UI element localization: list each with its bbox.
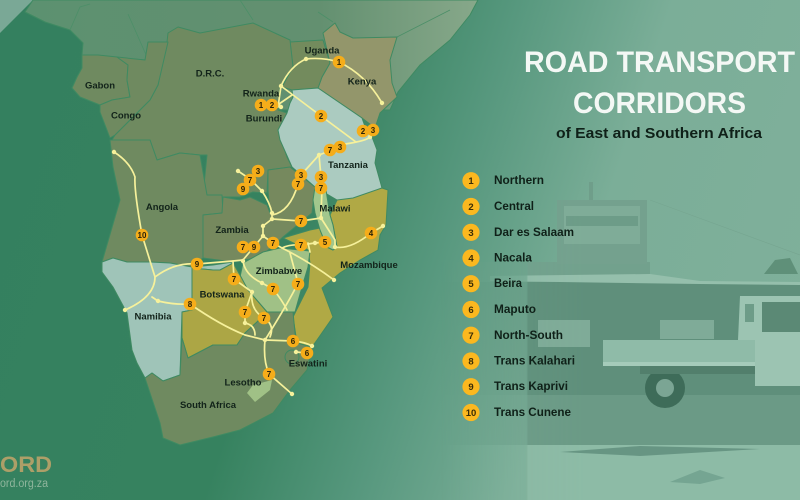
- corridor number badges: 7: [296, 280, 301, 289]
- country: South Africa: [145, 312, 312, 445]
- country: Tanzania: [278, 88, 382, 200]
- country labels: South Africa: [180, 400, 237, 411]
- country: Uganda: [282, 40, 330, 90]
- country labels: Angola: [146, 202, 179, 213]
- corridor number badges: 7: [241, 243, 246, 252]
- country: Zimbabwe: [240, 248, 310, 312]
- country labels: Uganda: [305, 46, 340, 56]
- corridor number badges: 5: [323, 238, 328, 247]
- corridor number badges: 2: [319, 112, 324, 121]
- country labels: Mozambique: [340, 260, 398, 271]
- country labels: Congo: [111, 110, 141, 122]
- corridor number badges: [136, 56, 379, 380]
- country: Zambia: [203, 167, 315, 262]
- country labels: Lesotho: [225, 378, 262, 388]
- country: Mozambique: [283, 188, 388, 347]
- corridor number badges: 2: [361, 127, 366, 136]
- country: Gabon: [72, 55, 130, 105]
- legend: corridors: 4: [468, 254, 474, 264]
- corridor number badges: 6: [291, 337, 296, 346]
- country labels: Zambia: [215, 225, 249, 236]
- northern land mass: [25, 0, 478, 110]
- country labels: Kenya: [348, 76, 377, 88]
- corridor number badges: 7: [262, 314, 267, 323]
- country labels: Eswatini: [289, 358, 327, 370]
- corridor number badges: 3: [338, 143, 343, 152]
- corridor number badges: 7: [328, 146, 333, 155]
- country: Congo: [100, 42, 168, 138]
- country: Eswatini: [285, 350, 299, 364]
- legend: corridors: 3: [468, 228, 474, 239]
- country labels: Rwanda: [243, 88, 280, 100]
- background photo: roadside truck: [495, 182, 800, 500]
- country: Angola: [102, 140, 223, 267]
- northern borders: [70, 0, 450, 57]
- legend: corridors: 1: [468, 176, 474, 187]
- country: Kenya: [318, 23, 397, 128]
- country labels: D.R.C.: [196, 68, 224, 80]
- corridor number badges: 7: [232, 275, 237, 284]
- country labels: Tanzania: [328, 160, 369, 171]
- corridor number badges: 8: [188, 300, 193, 309]
- country labels: [85, 46, 398, 411]
- corridor number badges: 9: [195, 260, 200, 269]
- legend: corridors: Dar es Salaam: [494, 227, 574, 239]
- country: Namibia: [102, 258, 233, 381]
- country: Botswana: [182, 263, 267, 358]
- corridor number badges: 6: [305, 349, 310, 358]
- logo, cropped at the left edge: ORD: [0, 452, 52, 477]
- legend: corridors: 5: [468, 279, 474, 290]
- country labels: Burundi: [246, 114, 282, 124]
- legend: corridors: Maputo: [494, 304, 536, 316]
- title: CORRIDORS: [573, 87, 746, 120]
- legend: corridors: Nacala: [494, 252, 533, 264]
- corridor number badges: 1: [259, 101, 264, 110]
- corridor number badges: 7: [271, 285, 276, 294]
- country: Lesotho: [247, 380, 272, 402]
- corridor number badges: 1: [337, 58, 342, 67]
- country labels: Gabon: [85, 80, 115, 92]
- corridor number badges: 3: [319, 173, 324, 182]
- logo, cropped at the left edge: [0, 452, 52, 490]
- corridor number badges: 7: [248, 176, 253, 185]
- corridor number badges: 7: [296, 180, 301, 189]
- legend: corridors: 10: [466, 408, 476, 419]
- legend: corridors: Trans Kaprivi: [494, 381, 568, 393]
- legend: corridors: 6: [468, 305, 474, 316]
- corridor number badges: 2: [270, 101, 275, 110]
- corridor number badges: 3: [299, 171, 304, 180]
- legend: corridors: Trans Cunene: [494, 407, 571, 419]
- corridor number badges: 7: [299, 217, 304, 226]
- legend: corridors: Trans Kalahari: [494, 356, 575, 368]
- corridor number badges: 4: [369, 229, 374, 238]
- legend: corridors: Beira: [494, 278, 523, 290]
- legend: corridors: 9: [468, 382, 474, 393]
- corridor number badges: 7: [271, 239, 276, 248]
- corridor number badges: 3: [371, 126, 376, 135]
- legend: corridors: [462, 172, 575, 421]
- corridor number badges: 7: [299, 241, 304, 250]
- corridor number badges: 9: [252, 243, 257, 252]
- title: [524, 46, 795, 120]
- legend: corridors: Northern: [494, 175, 544, 187]
- road corridors: [112, 57, 385, 396]
- corridor number badges: 7: [243, 308, 248, 317]
- country labels: Botswana: [200, 290, 245, 300]
- corridor number badges: 7: [319, 184, 324, 193]
- corridor number badges: 7: [267, 370, 272, 379]
- country labels: Malawi: [319, 204, 351, 214]
- logo, cropped at the left edge: ord.org.za: [0, 478, 49, 490]
- map of East and Southern Africa: [0, 0, 478, 445]
- country: Malawi: [313, 187, 337, 250]
- legend: corridors: 2: [468, 202, 474, 213]
- title: ROAD TRANSPORT: [524, 46, 795, 79]
- country: D.R.C.: [112, 23, 293, 215]
- subtitle: of East and Southern Africa: [556, 125, 763, 142]
- legend: corridors: 8: [468, 356, 474, 368]
- country labels: Zimbabwe: [256, 266, 302, 277]
- legend: corridors: North-South: [494, 330, 563, 342]
- legend: corridors: Central: [494, 201, 534, 213]
- corridor number badges: 10: [138, 231, 147, 240]
- corridor number badges: 3: [256, 167, 261, 176]
- legend: corridors: 7: [468, 331, 474, 342]
- corridor number badges: 9: [241, 185, 246, 194]
- country labels: Namibia: [135, 312, 172, 322]
- light corner of West Africa: [0, 0, 33, 33]
